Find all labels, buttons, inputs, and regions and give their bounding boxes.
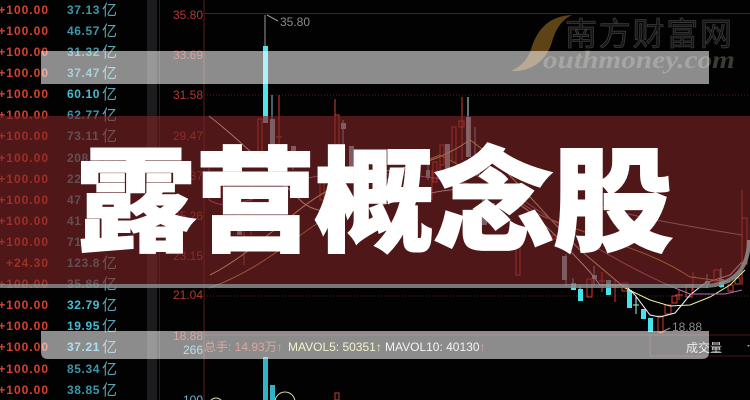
left table: unit column: 亿 [102, 65, 117, 82]
up candles [209, 95, 747, 332]
left table: turnover column: 73.11 [67, 129, 99, 143]
price axis labels: 33.69 [173, 48, 203, 62]
candlestick chart [209, 15, 747, 334]
bottom translucent band [41, 331, 709, 359]
left table: unit column: 亿 [102, 23, 117, 40]
left table: unit column: 亿 [102, 382, 117, 399]
price axis labels: 35.80 [173, 8, 203, 22]
left table: unit column: 亿 [102, 276, 117, 293]
left table: turnover column: 41 [67, 214, 82, 228]
left table: percent change column [0, 3, 49, 397]
volume legend [204, 340, 750, 355]
price axis labels: 25.26 [173, 209, 203, 223]
left table: unit column: 亿 [102, 361, 117, 378]
high price marker: 35.80 [280, 15, 310, 29]
high price marker [267, 15, 310, 29]
left table: turnover column: 62.77 [67, 108, 100, 122]
left table: turnover column: 37.21 [67, 340, 100, 354]
low price marker: 18.88 [672, 320, 702, 334]
central red band [0, 116, 750, 284]
price axis labels: 29.47 [173, 129, 203, 143]
left table: unit column: 亿 [102, 318, 117, 335]
left table: turnover column: 208.8 [67, 151, 100, 165]
price axis labels: 21.04 [173, 288, 203, 302]
left table: turnover column: 38.85 [67, 383, 100, 397]
volume legend: 成交量 [686, 340, 722, 355]
left table: unit column: 亿 [102, 297, 117, 314]
left table: turnover column: 47 [67, 193, 82, 207]
left table: unit column: 亿 [102, 150, 117, 167]
title: 露营概念股 [76, 111, 673, 275]
left table: unit column: 亿 [102, 128, 117, 145]
left table: unit column [102, 2, 117, 399]
left table: turnover column [67, 3, 100, 397]
price axis labels: 27.37 [173, 169, 203, 183]
left table: turnover column: 35.86 [67, 277, 100, 291]
watermark chinese name: 南方财富网 [565, 16, 732, 52]
red band lower edge [0, 240, 749, 286]
down candles [237, 15, 597, 286]
left table: unit column: 亿 [102, 2, 117, 19]
watermark domain: outhmoney.com [543, 47, 735, 74]
left table: turnover column: 71 [67, 235, 82, 249]
volume legend: MAVOL5: 50351↑ [288, 340, 382, 354]
left table: turnover column: 19.95 [67, 319, 100, 333]
left table: turnover column: 46.57 [67, 24, 100, 38]
left table: turnover column: 31.32 [67, 45, 100, 59]
left table: unit column: 亿 [102, 107, 117, 124]
price axis labels: 23.15 [173, 249, 203, 263]
price axis labels: 18.88 [173, 329, 203, 343]
left table: unit column: 亿 [102, 339, 117, 356]
volume legend: 总手: 14.93万↑ [204, 340, 283, 354]
logo swoosh [511, 15, 572, 71]
left table: unit column: 亿 [102, 86, 117, 103]
left table: turnover column: 22 [67, 172, 82, 186]
left table: turnover column: 37.13 [67, 3, 100, 17]
left table: turnover column: 32.79 [67, 298, 100, 312]
left table: unit column: 亿 [102, 44, 117, 61]
left table: turnover column: 123.8 [67, 256, 100, 270]
volume legend: MAVOL10: 40130↑ [385, 340, 486, 354]
top translucent band [41, 51, 709, 84]
price axis labels [173, 8, 203, 400]
left table: turnover column: 37.47 [67, 66, 100, 80]
watermark logo [511, 15, 735, 74]
moving average lines [209, 116, 745, 317]
left table: percent change column: +24.30 [6, 256, 49, 270]
left table: unit column: 亿 [102, 255, 117, 272]
left table: turnover column: 85.34 [67, 362, 100, 376]
price axis labels: 266 [183, 343, 203, 357]
cyan down candles [571, 268, 724, 332]
price axis labels: 31.58 [173, 88, 203, 102]
volume bars [209, 357, 339, 400]
left table: turnover column: 60.10 [67, 87, 100, 101]
